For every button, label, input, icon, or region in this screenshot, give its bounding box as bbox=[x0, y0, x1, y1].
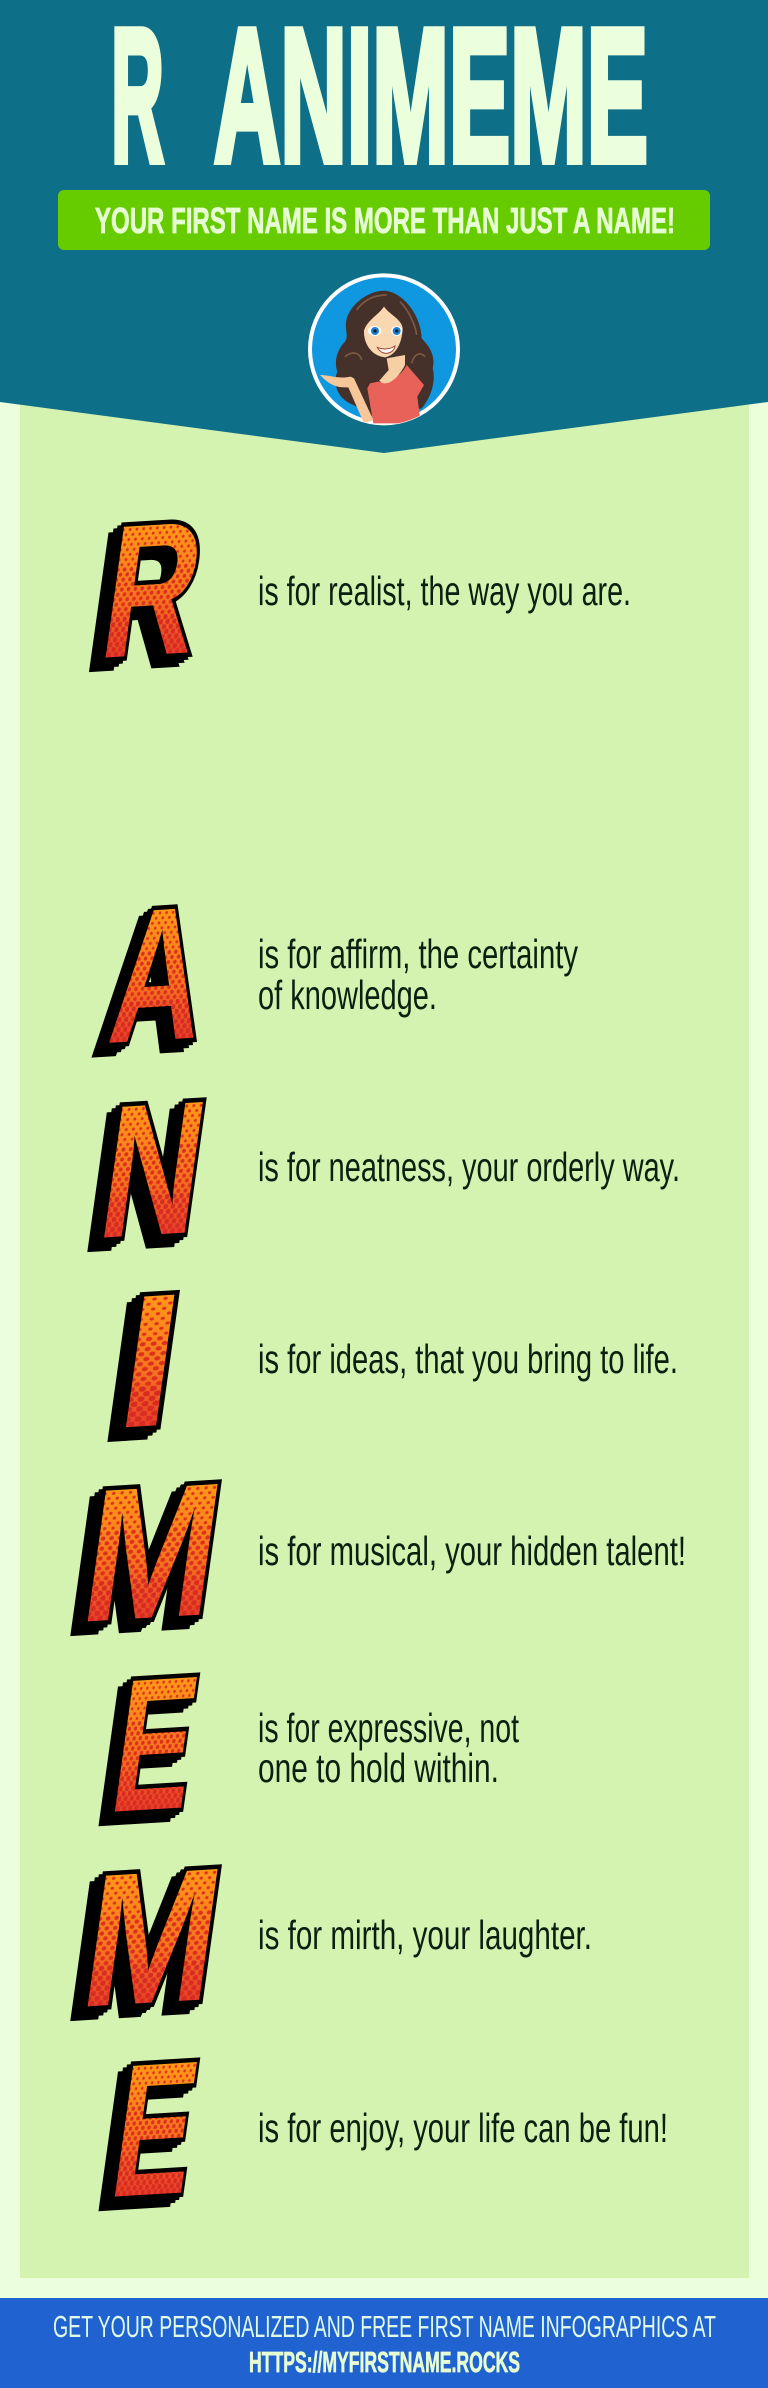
second letter M: M bbox=[71, 1828, 234, 2048]
second letter E row bbox=[101, 2021, 668, 2238]
letter I row bbox=[106, 1252, 678, 1469]
text A: is for affirm, the certainty bbox=[258, 931, 578, 977]
text A: of knowledge. bbox=[258, 972, 437, 1018]
letter N row bbox=[89, 1061, 680, 1279]
letter M row bbox=[71, 1443, 686, 1663]
text E: is for expressive, not bbox=[258, 1705, 519, 1751]
header chevron background bbox=[0, 0, 768, 453]
letter I: I bbox=[106, 1252, 194, 1469]
letter M: M bbox=[71, 1443, 234, 1663]
second letter M row bbox=[71, 1828, 592, 2048]
letter A: A bbox=[102, 867, 214, 1084]
letter N: N bbox=[89, 1061, 218, 1279]
text E: one to hold within. bbox=[258, 1745, 499, 1791]
content panel bbox=[20, 380, 749, 2278]
tagline banner bbox=[58, 190, 710, 250]
letter E row bbox=[101, 1636, 519, 1853]
letter E: E bbox=[101, 1636, 210, 1853]
text A bbox=[258, 931, 578, 1018]
text second M: is for mirth, your laughter. bbox=[258, 1912, 592, 1958]
letter R row bbox=[91, 481, 631, 699]
text E bbox=[258, 1705, 519, 1791]
letter A row bbox=[102, 867, 578, 1084]
second letter E: E bbox=[101, 2021, 210, 2238]
letter R: R bbox=[91, 481, 214, 699]
title bbox=[111, 0, 648, 202]
avatar: smiling woman in circle bbox=[308, 273, 460, 425]
footer bar bbox=[0, 2298, 768, 2388]
footer url: HTTPS://MYFIRSTNAME.ROCKS bbox=[249, 2347, 520, 2379]
